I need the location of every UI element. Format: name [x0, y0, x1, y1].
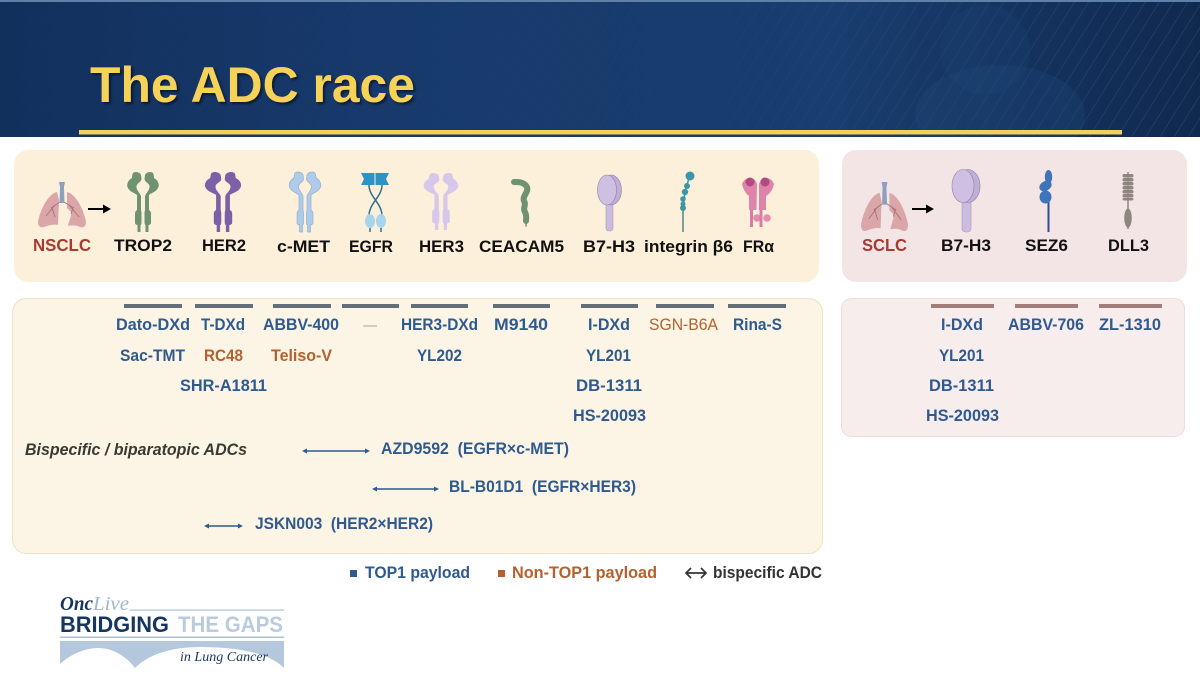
- column: FR alpha ADC: Rina-S: [733, 316, 782, 334]
- column: HER2 ADCs: [180, 316, 267, 395]
- column: B7-H3 SCLC ADCs: YL201: [939, 347, 984, 365]
- label: NSCLC: NSCLC: [33, 235, 91, 255]
- column: B7-H3 ADCs: YL201: [586, 347, 631, 365]
- icon: HER3: [424, 173, 458, 230]
- column: EGFR none: —: [363, 317, 377, 334]
- icon: HER2: [205, 172, 241, 232]
- column: HER2 ADCs: T-DXd: [201, 316, 245, 334]
- legend: [350, 564, 822, 582]
- column: c-MET ADCs: [263, 316, 339, 365]
- panel: NSCLC ADCs: [12, 298, 822, 554]
- column: B7-H3 SCLC ADCs: DB-1311: [929, 377, 994, 395]
- label: CEACAM5: CEACAM5: [479, 237, 564, 256]
- column: B7-H3 SCLC ADCs: I-DXd: [941, 316, 983, 334]
- icon: lungs SCLC: [861, 182, 908, 231]
- legend: Non-TOP1 payload: [512, 564, 657, 582]
- column: B7-H3 ADCs: [573, 316, 646, 425]
- column: SEZ6 ADC: ABBV-706: [1008, 316, 1084, 334]
- logo: OncLive Bridging the Gaps: in Lung Cancer: [180, 650, 269, 665]
- icon: SEZ6: [1037, 170, 1054, 232]
- column: c-MET ADCs: ABBV-400: [263, 316, 339, 334]
- logo: OncLive Bridging the Gaps: BRIDGING: [60, 612, 169, 637]
- arrow: AZD9592 span: [302, 448, 370, 454]
- column: HER3 ADCs: YL202: [417, 347, 462, 365]
- icon: TROP2: [127, 172, 159, 232]
- column: CEACAM5 ADC: M9140: [494, 316, 548, 334]
- icon: FR alpha: [742, 178, 774, 227]
- column: c-MET ADCs: Teliso-V: [271, 347, 332, 365]
- panel: NSCLC targets: [14, 150, 819, 282]
- column: HER2 ADCs: RC48: [204, 347, 243, 365]
- logo: OncLive Bridging the Gaps: Live: [92, 593, 129, 615]
- column: TROP2 ADCs: [116, 316, 190, 365]
- bispecific: BL-B01D1: BL-B01D1 (EGFR×HER3): [449, 478, 636, 496]
- bispecific: AZD9592: AZD9592 (EGFR×c-MET): [381, 440, 569, 458]
- logo: OncLive Bridging the Gaps: Onc: [60, 593, 93, 615]
- label: HER2: HER2: [202, 236, 246, 255]
- arrow: SCLC to targets: [912, 204, 934, 214]
- target column bars: [124, 304, 786, 308]
- title: The ADC race: [90, 57, 415, 113]
- icon: integrin beta6: [680, 172, 694, 232]
- column: TROP2 ADCs: Sac-TMT: [120, 347, 185, 365]
- icon: B7-H3 SCLC: [952, 170, 980, 232]
- panel: SCLC targets: [842, 150, 1187, 282]
- column: B7-H3 ADCs: DB-1311: [576, 377, 642, 395]
- bispecific: JSKN003: JSKN003 (HER2×HER2): [255, 515, 433, 533]
- label: integrin beta6: integrin β6: [644, 237, 733, 256]
- arrow: JSKN003 span: [204, 524, 243, 528]
- legend: TOP1 payload: [365, 564, 470, 582]
- icon: DLL3: [1122, 172, 1134, 229]
- arrow: NSCLC to targets: [88, 204, 111, 214]
- title underline: [79, 130, 1122, 134]
- label: DLL3: DLL3: [1108, 236, 1149, 255]
- column: HER3 ADCs: [401, 316, 478, 365]
- logo: OncLive Bridging the Gaps: THE GAPS: [178, 612, 283, 637]
- icon: EGFR: [361, 173, 389, 232]
- label: B7-H3 SCLC: B7-H3: [941, 236, 991, 255]
- heading: bispecific ADCs: Bispecific / biparatopic ADCs: [25, 441, 247, 459]
- column: HER2 ADCs: SHR-A1811: [180, 377, 267, 395]
- icon: B7-H3: [598, 175, 622, 231]
- label: c-MET: c-MET: [277, 237, 331, 256]
- column: B7-H3 SCLC ADCs: [926, 316, 999, 425]
- logo: OncLive Bridging the Gaps: [60, 593, 284, 668]
- column: HER3 ADCs: HER3-DXd: [401, 316, 478, 334]
- header banner: [0, 0, 1200, 137]
- icon: c-MET: [289, 172, 321, 232]
- panel: SCLC ADCs: [842, 298, 1184, 436]
- icon: CEACAM5: [514, 182, 527, 226]
- column: integrin ADC: SGN-B6A: [649, 316, 718, 334]
- label: TROP2: TROP2: [114, 236, 172, 255]
- column: TROP2 ADCs: Dato-DXd: [116, 316, 190, 334]
- SCLC column bars: [931, 304, 1162, 308]
- label: HER3: HER3: [419, 237, 464, 256]
- column: DLL3 ADC: ZL-1310: [1099, 316, 1161, 334]
- column: B7-H3 ADCs: I-DXd: [588, 316, 630, 334]
- icon: lungs NSCLC: [38, 182, 86, 227]
- label: FR alpha: FRα: [743, 237, 775, 256]
- legend: bispecific ADC: [713, 564, 822, 582]
- label: SEZ6: SEZ6: [1025, 236, 1068, 255]
- label: B7-H3: B7-H3: [583, 237, 635, 256]
- arrow: BL-B01D1 span: [372, 486, 439, 492]
- label: EGFR: EGFR: [349, 237, 393, 256]
- column: B7-H3 ADCs: HS-20093: [573, 407, 646, 425]
- column: B7-H3 SCLC ADCs: HS-20093: [926, 407, 999, 425]
- label: SCLC: SCLC: [862, 235, 907, 255]
